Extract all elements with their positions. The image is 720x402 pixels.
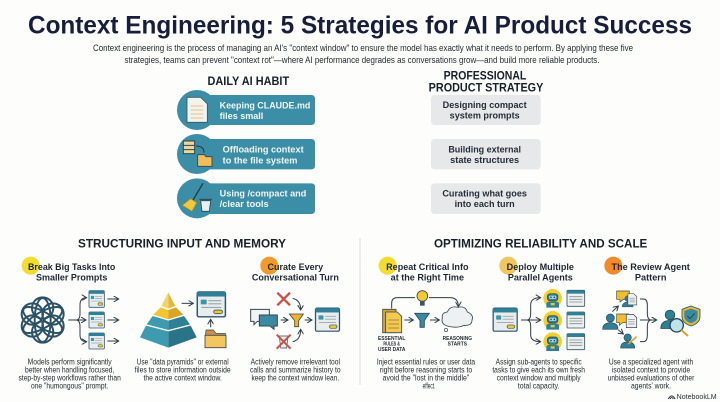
icon: lightbulb xyxy=(417,291,428,306)
description: Actively remove irrelevant tool xyxy=(251,357,340,366)
arrows xyxy=(404,318,439,321)
strategy heading: Conversational Turn xyxy=(252,273,339,283)
icons: small prompt windows xyxy=(89,291,104,349)
strategy heading: Smaller Prompts xyxy=(36,273,107,283)
badge xyxy=(604,257,622,275)
strategy heading: Parallel Agents xyxy=(508,273,573,283)
icon: shield xyxy=(682,306,700,326)
label: reasoning starts xyxy=(443,336,473,348)
heading: daily AI habit: DAILY AI HABIT xyxy=(207,74,290,88)
arrows: split to agents xyxy=(521,298,541,342)
label: essential rules and user data xyxy=(378,336,406,353)
description: isolated context to provide xyxy=(612,366,691,375)
logo: NotebookLM: NotebookLM xyxy=(677,392,717,401)
icon: chat and document middle xyxy=(617,314,637,328)
strategy card: system prompts: system prompts xyxy=(450,111,520,121)
heading: professional product strategy: PRODUCT STRATEGY xyxy=(429,81,543,95)
description: right before reasoning starts to xyxy=(380,366,473,375)
heading: professional product strategy xyxy=(429,69,543,95)
habit pill: CLAUDE.md: files small xyxy=(220,111,263,121)
description: total capacity. xyxy=(518,382,559,391)
label: essential rules and user data: RULES & xyxy=(383,341,400,347)
icon: document xyxy=(187,97,207,122)
icon: context window xyxy=(315,308,339,331)
arrow: curved reminder xyxy=(392,298,458,309)
strategy: review agent xyxy=(603,257,700,391)
description: one "humongous" prompt. xyxy=(31,382,108,391)
icon: folder xyxy=(205,330,226,348)
strategy heading: at the Right Time xyxy=(391,273,464,283)
strategy card: system prompts xyxy=(431,95,541,125)
icons: agents xyxy=(543,289,562,351)
icon: server to folder xyxy=(183,141,212,166)
strategy: break big tasks xyxy=(18,257,121,391)
habit pill: CLAUDE.md xyxy=(177,90,315,130)
strategy heading: The Review Agent xyxy=(611,262,690,272)
icon: thought cloud xyxy=(442,307,472,332)
panel: habit versus strategy comparison xyxy=(177,69,543,218)
description xyxy=(250,357,341,383)
strategy heading xyxy=(386,262,469,283)
icon: main window xyxy=(493,308,517,331)
icon: red cross xyxy=(277,293,290,305)
description: better when handling focused, xyxy=(25,366,114,375)
strategy card: system prompts: Designing compact xyxy=(443,100,527,110)
strategy card: state structures xyxy=(431,139,541,169)
description: context window and multiply xyxy=(497,374,581,383)
strategy card: state structures: state structures xyxy=(450,155,519,165)
arrows xyxy=(281,298,312,342)
arrows: inputs xyxy=(612,306,623,334)
habit pill: offloading: Offloading context xyxy=(223,145,304,155)
strategy heading xyxy=(507,262,574,283)
strategy heading: Deploy Multiple xyxy=(507,262,574,272)
arrows: converge to reviewer xyxy=(640,299,657,342)
description: the active context window. xyxy=(143,374,222,383)
intro text: strategies, teams can prevent "context rot"—where AI performance degrades as conversations grow—and build more reliable products. xyxy=(124,54,600,65)
icon: funnel xyxy=(289,314,303,327)
label: reasoning starts: REASONING xyxy=(443,336,473,342)
description xyxy=(377,358,476,391)
strategy card: curating: Curating what goes xyxy=(442,189,527,199)
icon: chat bubbles xyxy=(251,309,277,329)
icon: broom and bin xyxy=(182,183,212,211)
strategy: data pyramid xyxy=(135,292,231,383)
panel: structuring input and memory xyxy=(18,237,341,391)
description: files to store information outside xyxy=(135,365,231,374)
title: Context Engineering: 5 Strategies for AI Product Success xyxy=(28,12,692,40)
icons: agent windows xyxy=(567,290,585,350)
divider xyxy=(359,238,361,385)
description: tasks to give each its own fresh xyxy=(492,366,585,375)
icon: reviewer with magnifier xyxy=(661,310,688,336)
strategy: curate every turn xyxy=(250,257,341,383)
description: avoid the "lost in the middle" xyxy=(383,374,469,383)
icon: source person xyxy=(603,314,618,329)
icon: person with pen xyxy=(621,334,637,348)
badge xyxy=(22,257,40,275)
description: Models perform significantly xyxy=(28,358,112,367)
habit pill: compact and clear: /clear tools xyxy=(220,199,269,209)
description xyxy=(608,358,695,391)
description xyxy=(135,357,231,383)
badge xyxy=(260,257,278,275)
strategy card: curating: into each turn xyxy=(455,199,515,209)
description: step-by-step workflows rather than xyxy=(18,374,121,383)
arrow xyxy=(209,319,212,327)
strategy heading xyxy=(252,262,339,283)
strategy heading: Pattern xyxy=(635,273,667,283)
icon: crossed out bin xyxy=(277,335,291,349)
habit pill: compact and clear: Using /compact and xyxy=(220,189,307,199)
description: Use "data pyramids" or external xyxy=(137,357,229,366)
heading: STRUCTURING INPUT AND MEMORY xyxy=(78,237,286,251)
strategy: parallel agents xyxy=(492,257,585,391)
description: effect. xyxy=(423,382,435,391)
icon: data pyramid xyxy=(140,292,197,348)
icon: context window xyxy=(197,292,225,317)
description: keep the context window lean. xyxy=(251,374,339,383)
strategy heading xyxy=(611,262,690,283)
icon: tangled knot xyxy=(20,297,66,343)
label: essential rules and user data: USER DATA xyxy=(378,347,405,353)
description: agents' work. xyxy=(631,382,671,391)
description xyxy=(492,358,585,391)
panel: optimizing reliability and scale xyxy=(377,237,717,401)
description: Use a specialized agent with xyxy=(609,358,693,367)
badge xyxy=(379,257,397,275)
strategy card: state structures: Building external xyxy=(448,144,521,154)
habit pill: compact and clear xyxy=(177,178,315,218)
intro text xyxy=(93,42,633,65)
icon: chat and document top xyxy=(617,291,637,307)
strategy heading: Repeat Critical Info xyxy=(386,262,469,272)
description: Assign sub-agents to specific xyxy=(496,358,582,367)
strategy: repeat critical info xyxy=(377,257,476,391)
label: essential rules and user data: ESSENTIAL xyxy=(378,336,406,342)
habit pill: CLAUDE.md: Keeping CLAUDE.md xyxy=(220,101,311,111)
arrows: split into prompts xyxy=(68,298,119,342)
label: reasoning starts: STARTS xyxy=(448,342,467,348)
icon: funnel xyxy=(415,313,429,327)
arrow xyxy=(182,302,193,305)
habit pill: offloading: to the file system xyxy=(223,155,297,165)
strategy heading xyxy=(28,262,116,283)
intro text: Context engineering is the process of managing an AI's "context window" to ensure the model has exactly what it needs to perform. By applying these five xyxy=(93,42,633,53)
icon: rules documents xyxy=(383,309,402,333)
badge xyxy=(499,257,517,275)
heading: professional product strategy: PROFESSIONAL xyxy=(444,69,526,83)
habit pill: offloading xyxy=(177,134,315,174)
strategy heading: Curate Every xyxy=(267,262,324,272)
strategy card: curating xyxy=(431,183,541,214)
description: calls and summarize history to xyxy=(250,365,341,374)
description: Inject essential rules or user data xyxy=(377,358,476,367)
description: unbiased evaluations of other xyxy=(608,374,695,383)
description xyxy=(18,358,121,391)
strategy heading: Break Big Tasks Into xyxy=(28,262,116,272)
heading: OPTIMIZING RELIABILITY AND SCALE xyxy=(434,237,647,251)
